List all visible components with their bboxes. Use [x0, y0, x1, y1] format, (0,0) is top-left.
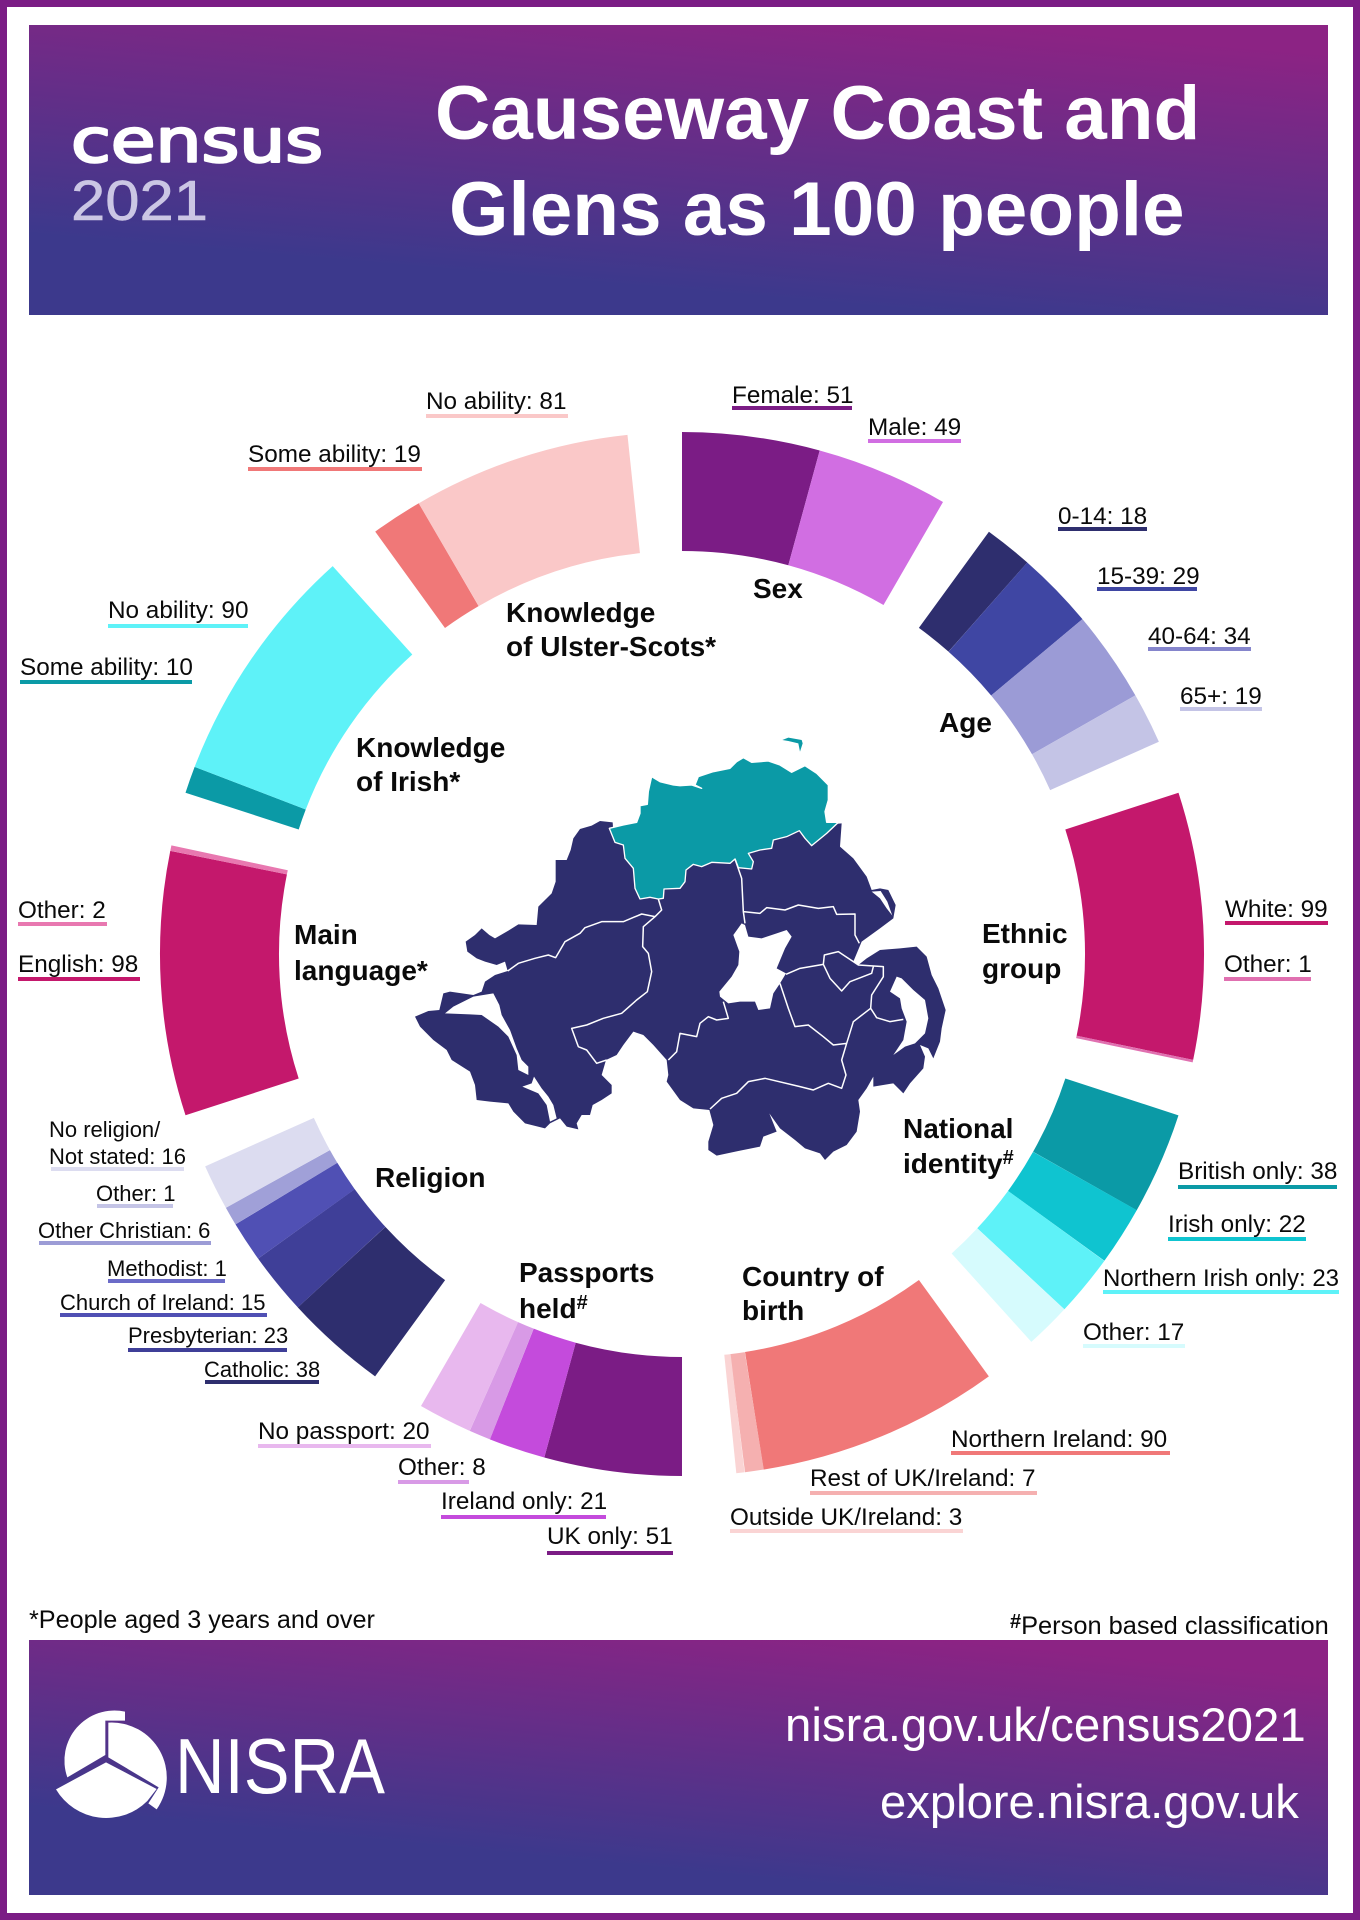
label: other: Other: 1 [1224, 951, 1312, 978]
heading: knowledge of ulster-scots: Knowledge [506, 597, 655, 628]
logo: census 2021: census [71, 106, 323, 176]
label: irish only: Irish only: 22 [1168, 1211, 1306, 1238]
label: no religion: No religion/ [49, 1117, 161, 1142]
heading: country of birth [742, 1261, 884, 1326]
label: no ability: No ability: 81 [426, 388, 566, 415]
heading: ethnic group: Ethnic [982, 918, 1068, 949]
heading: main language: language* [294, 955, 428, 986]
label: rest of uk/ireland: Rest of UK/Ireland: 7 [810, 1465, 1036, 1492]
panel: age [939, 503, 1262, 766]
label: no passport: No passport: 20 [258, 1418, 430, 1445]
label: some ability: Some ability: 10 [20, 654, 193, 681]
panel: sex [682, 382, 961, 604]
heading: national identity: # [1003, 1147, 1014, 1169]
label: no religion: Not stated: 16 [49, 1144, 186, 1169]
heading: main language: Main [294, 919, 358, 950]
ring segment: knowledge of irish [242, 610, 372, 811]
panel: knowledge of irish [20, 597, 505, 811]
heading: passports held: held [519, 1293, 577, 1324]
heading: country of birth: Country of [742, 1261, 884, 1292]
label: presbyterian: Presbyterian: 23 [128, 1323, 288, 1348]
label: uk only: UK only: 51 [547, 1523, 673, 1550]
footnote: person based: # [1010, 1611, 1021, 1633]
heading: passports held: Passports [519, 1257, 654, 1288]
footnote: aged 3 and over: *People aged 3 years and over [29, 1606, 375, 1634]
heading: knowledge of irish: of Irish* [356, 766, 460, 797]
website links [785, 1699, 1306, 1829]
panel: ethnic group [982, 811, 1328, 1050]
heading: main language [294, 919, 428, 986]
label: other: Other: 8 [398, 1454, 486, 1481]
label: other: Other: 2 [18, 897, 106, 924]
label: 0-14: 0-14: 18 [1058, 503, 1147, 530]
label: no religion [49, 1117, 186, 1171]
logo: nisra: NISRA [175, 1722, 385, 1810]
label: methodist: Methodist: 1 [107, 1256, 227, 1281]
heading: passports held: # [577, 1292, 588, 1314]
island: rathlin [782, 738, 803, 752]
ring segment: sex [682, 492, 913, 554]
map: northern ireland council areas [415, 738, 946, 1160]
label: female: Female: 51 [732, 382, 854, 409]
heading: knowledge of ulster-scots: of Ulster-Scots* [506, 631, 716, 662]
map silhouette [415, 821, 946, 1160]
title: Causeway Coast and [435, 71, 1200, 156]
panel: main language [18, 858, 428, 1097]
label: ireland only: Ireland only: 21 [441, 1488, 607, 1515]
label: british only: British only: 38 [1178, 1158, 1337, 1185]
label: 65+: 65+: 19 [1180, 683, 1262, 710]
footnote: person based: Person based classification [1021, 1612, 1329, 1640]
website links: nisra.gov.uk/census2021 [785, 1699, 1306, 1752]
header banner [29, 25, 1328, 315]
title: Glens as 100 people [449, 167, 1185, 252]
logo: census 2021 [71, 106, 323, 233]
label: some ability: Some ability: 19 [248, 441, 421, 468]
heading: national identity: National [903, 1113, 1013, 1144]
heading: national identity: identity [903, 1148, 1003, 1179]
label: northern ireland: Northern Ireland: 90 [951, 1426, 1167, 1453]
heading: age: Age [939, 707, 992, 738]
heading: knowledge of irish [356, 732, 505, 797]
logo: nisra [56, 1711, 385, 1818]
highlighted area: causeway coast and glens [609, 758, 838, 899]
label: other: Other: 1 [96, 1181, 175, 1206]
label: english: English: 98 [18, 951, 138, 978]
ring segment: age [954, 580, 1104, 766]
heading: religion: Religion [375, 1162, 485, 1193]
label: white: White: 99 [1225, 896, 1328, 923]
ring segment: passports held [451, 1354, 682, 1416]
ring segment: main language [219, 858, 242, 1097]
heading: knowledge of ulster-scots [506, 597, 716, 662]
website links: explore.nisra.gov.uk [880, 1776, 1299, 1829]
heading: country of birth: birth [742, 1295, 804, 1326]
ring segment: country of birth [730, 1328, 954, 1414]
label: 40-64: 40-64: 34 [1148, 623, 1251, 650]
panel: passports held [258, 1257, 682, 1555]
ring segment: ethnic group [1122, 811, 1145, 1050]
ring segment: religion [260, 1142, 410, 1328]
label: church of ireland: Church of Ireland: 15 [60, 1290, 265, 1315]
icon: nisra pie [56, 1711, 167, 1818]
label: other christian: Other Christian: 6 [38, 1218, 210, 1243]
heading: ethnic group [982, 918, 1068, 984]
title [435, 71, 1200, 252]
heading: passports held [519, 1257, 654, 1324]
council borders [508, 859, 903, 1109]
heading: knowledge of irish: Knowledge [356, 732, 505, 763]
label: other: Other: 17 [1083, 1319, 1184, 1346]
label: catholic: Catholic: 38 [204, 1357, 320, 1382]
label: northern irish only: Northern Irish only: 23 [1103, 1265, 1339, 1292]
label: 15-39: 15-39: 29 [1097, 563, 1200, 590]
label: male: Male: 49 [868, 414, 961, 441]
panel: religion [38, 1117, 485, 1384]
panel: national identity [903, 1097, 1339, 1348]
ring segment: national identity [992, 1097, 1122, 1298]
footer banner [29, 1640, 1328, 1895]
logo: census 2021: 2021 [71, 169, 208, 233]
panel: knowledge of ulster-scots [248, 388, 716, 662]
heading: sex: Sex [753, 573, 803, 604]
heading: national identity [903, 1113, 1014, 1179]
ring segment: knowledge of ulster-scots [410, 494, 634, 580]
label: no ability: No ability: 90 [108, 597, 248, 624]
loughs [445, 891, 928, 1122]
label: outside uk/ireland: Outside UK/Ireland: 3 [730, 1504, 962, 1531]
heading: ethnic group: group [982, 953, 1061, 984]
panel: country of birth [730, 1261, 1170, 1533]
